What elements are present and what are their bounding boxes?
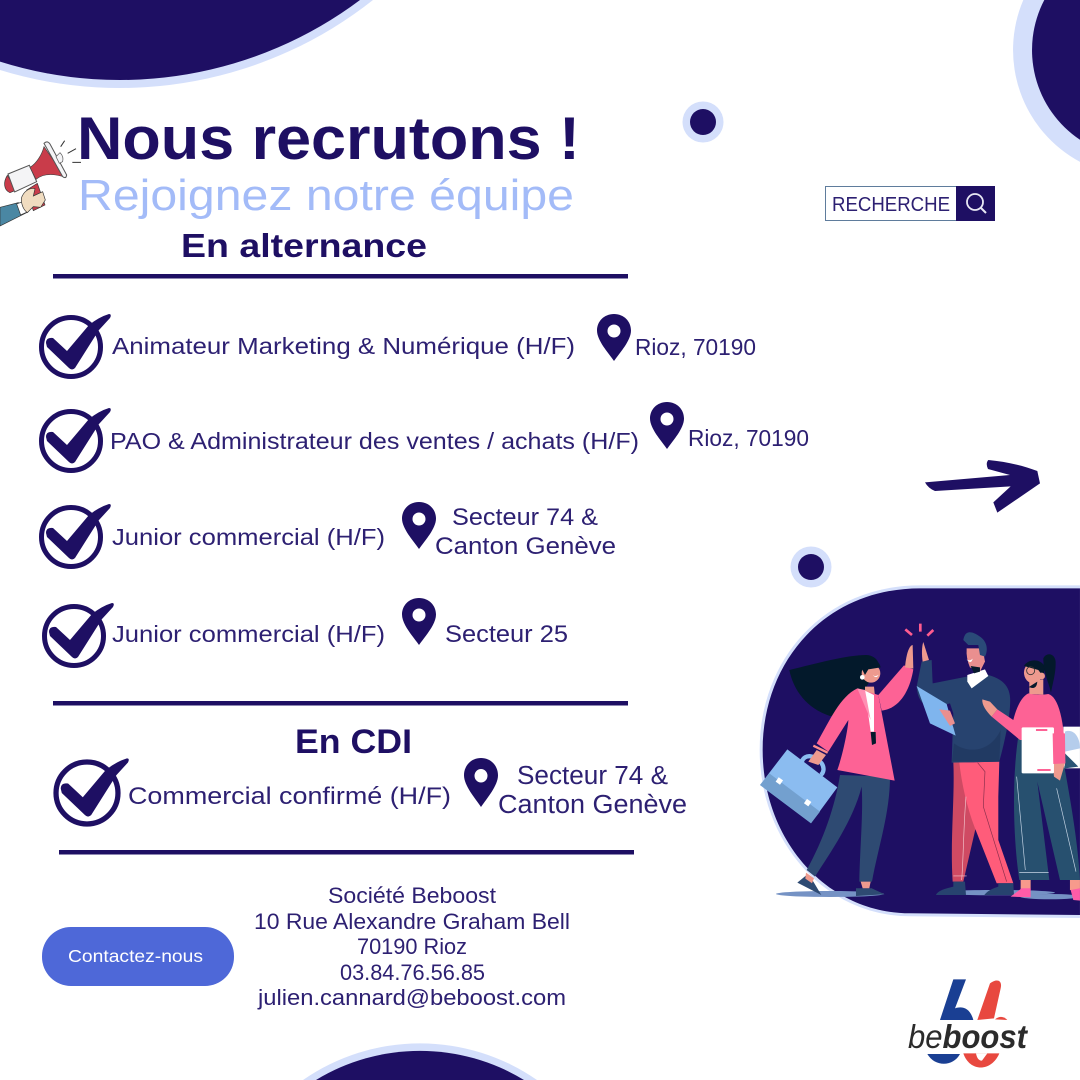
icon: check CDI [56, 758, 129, 824]
heading: en CDI: En CDI [295, 723, 412, 761]
contact address: julien.cannard@beboost.com [257, 985, 566, 1010]
woman right: chart [1063, 727, 1080, 768]
icon: pin 4 [402, 598, 436, 645]
illustration: team high five [760, 588, 1080, 915]
shadows [776, 891, 884, 897]
logo mark [927, 979, 1007, 1067]
woman left: legs [807, 775, 890, 882]
man: tablet [917, 686, 956, 736]
divider 1 [53, 274, 628, 278]
background blob: top right [1013, 0, 1080, 162]
job row 2 [42, 402, 809, 470]
job title 3: Junior commercial (H/F) [112, 524, 385, 550]
icon: check 3 [42, 504, 111, 566]
man: legs [952, 762, 977, 882]
woman left: head [862, 664, 880, 683]
background blob: bottom centre [303, 1043, 537, 1080]
job row 3 [42, 502, 616, 566]
man: collar [967, 669, 988, 688]
location 3 [435, 504, 616, 560]
location CDI: Canton Genève [498, 791, 687, 819]
location 4: Secteur 25 [445, 621, 568, 648]
man: head [967, 648, 985, 672]
icon: pin 2 [650, 402, 684, 449]
spark [905, 624, 933, 636]
location CDI: Secteur 74 & [517, 762, 668, 790]
icon: check 2 [42, 408, 111, 470]
job title 2: PAO & Administrateur des ventes / achats (H/F) [110, 428, 639, 454]
location 2: Rioz, 70190 [688, 425, 809, 451]
contact address: 70190 Rioz [357, 934, 467, 959]
location 3: Canton Genève [435, 533, 616, 560]
subtitle: Rejoignez notre équipe [78, 172, 574, 220]
woman left: body [865, 687, 875, 697]
panel outline [763, 588, 1080, 915]
title: Nous recrutons ! [77, 105, 580, 172]
decorative dot: top [682, 102, 724, 142]
contact address [254, 883, 570, 1010]
decorative dot: middle [790, 546, 832, 588]
background blob: top left [0, 0, 373, 88]
icon: pin 1 [597, 314, 631, 361]
man: sweater [917, 660, 1010, 763]
job title CDI: Commercial confirmé (H/F) [128, 783, 451, 810]
job row 1 [42, 314, 756, 376]
search box: RECHERCHE [832, 194, 950, 216]
woman left: hair [789, 655, 879, 716]
location 1: Rioz, 70190 [635, 334, 756, 360]
contact address: 03.84.76.56.85 [340, 960, 485, 985]
arrow [925, 460, 1040, 513]
contact address: 10 Rue Alexandre Graham Bell [254, 909, 570, 934]
woman right: paper [1022, 727, 1054, 773]
job title 4: Junior commercial (H/F) [112, 621, 385, 647]
button: contact: Contactez-nous [68, 946, 203, 966]
contact address: Société Beboost [328, 883, 496, 908]
job title 1: Animateur Marketing & Numérique (H/F) [112, 333, 575, 359]
icon: check 1 [42, 314, 111, 376]
woman right: head [1029, 679, 1043, 695]
logo: beboost [908, 979, 1029, 1067]
woman left: bag [760, 749, 837, 823]
icon: check 4 [44, 603, 114, 666]
location 3: Secteur 74 & [452, 504, 598, 531]
icon: pin 3 [402, 502, 436, 549]
icon: megaphone with hand [0, 141, 81, 226]
icon: pin CDI [464, 758, 498, 807]
search box [826, 186, 995, 221]
divider 2 [53, 701, 628, 706]
button: contact [42, 927, 234, 986]
logo wordmark: beboost [908, 1018, 1029, 1055]
job row 4 [44, 598, 568, 666]
woman right: top [992, 693, 1065, 764]
divider 3 [59, 850, 634, 854]
woman right: pants [1014, 737, 1080, 880]
location CDI [498, 762, 687, 819]
heading: en alternance: En alternance [181, 227, 427, 264]
job row CDI [56, 758, 687, 824]
